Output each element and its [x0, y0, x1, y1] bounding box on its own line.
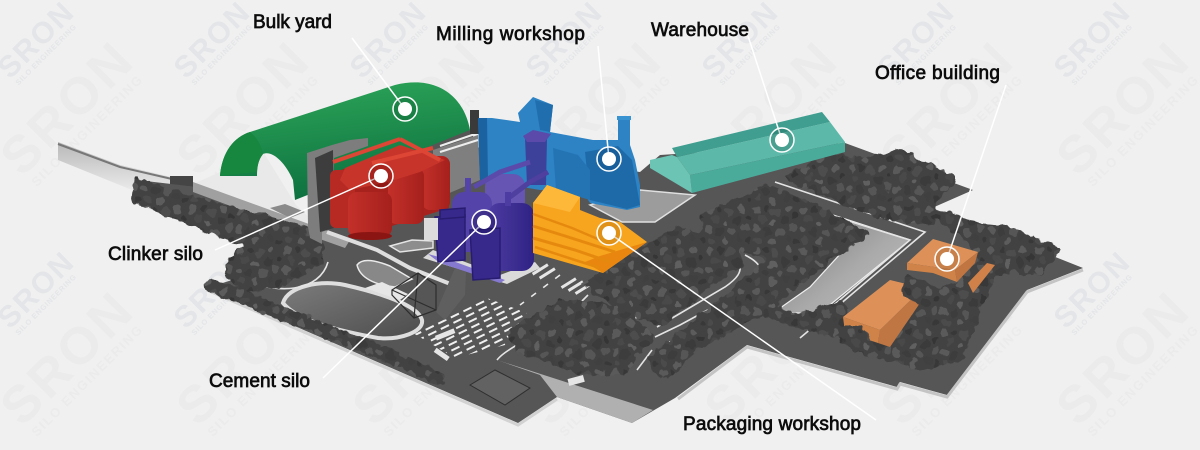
watermark pattern: SRON [344, 247, 432, 335]
watermark pattern: SRON [168, 247, 256, 335]
watermark pattern: SRON [341, 282, 496, 436]
label: Warehouse: Warehouse [651, 20, 749, 41]
pond service slab [365, 282, 408, 300]
marker: Cement silo [472, 210, 496, 234]
milling yard paving [590, 190, 695, 222]
watermark pattern: SRON [1045, 282, 1200, 436]
watermark pattern: SRON [1048, 247, 1136, 335]
watermark pattern: SILO ENGINEERING [380, 323, 497, 439]
watermark pattern: SRON [165, 32, 320, 186]
watermark pattern: SILO ENGINEERING [366, 23, 430, 87]
watermark pattern: SILO ENGINEERING [718, 273, 782, 337]
watermark pattern: SILO ENGINEERING [204, 73, 321, 189]
gravel patch by pond [357, 261, 412, 287]
watermark pattern: SRON [520, 247, 608, 335]
gatehouse [470, 370, 530, 405]
watermark pattern: SRON [341, 32, 496, 186]
building: milling workshop [478, 97, 640, 210]
watermark pattern: SILO ENGINEERING [894, 273, 958, 337]
watermark pattern: SILO ENGINEERING [908, 323, 1025, 439]
purple footing [428, 254, 505, 283]
watermark pattern: SRON [869, 32, 1024, 186]
watermark pattern: SILO ENGINEERING [1084, 73, 1200, 189]
concrete apron [497, 360, 653, 423]
marker: Milling workshop [597, 147, 621, 171]
leader line: Packaging workshop [609, 233, 876, 420]
watermark pattern: SRON [1045, 32, 1200, 186]
dome gray pad [270, 204, 305, 218]
watermark pattern: SRON [693, 282, 848, 436]
leader line: Clinker silo [215, 176, 381, 250]
label: Clinker silo: Clinker silo [108, 244, 203, 265]
watermark pattern: SILO ENGINEERING [556, 73, 673, 189]
leader line: Warehouse [748, 36, 782, 140]
building: clinker silos [330, 139, 450, 240]
leader line: Bulk yard [352, 38, 405, 109]
incoming conveyor strip [58, 142, 193, 192]
building: cement silos [424, 130, 551, 280]
rear conveyors behind silos [433, 110, 480, 200]
leader line: Milling workshop [598, 46, 609, 159]
central gravel field [773, 200, 910, 313]
watermark pattern: SILO ENGINEERING [556, 323, 673, 439]
marker: Clinker silo [369, 164, 393, 188]
leader line: Cement silo [323, 222, 484, 378]
watermark pattern: SRON [517, 282, 672, 436]
tree overlay near offices [845, 278, 942, 350]
loading frame [392, 273, 436, 318]
label: Cement silo: Cement silo [209, 371, 310, 392]
silo loading shed [436, 268, 466, 320]
crossing road markings [413, 298, 527, 358]
tree belts [135, 152, 1057, 378]
watermark pattern: SILO ENGINEERING [718, 23, 782, 87]
label: Office building: Office building [875, 63, 1000, 84]
watermark pattern: SILO ENGINEERING [190, 273, 254, 337]
watermark pattern: SILO ENGINEERING [204, 323, 321, 439]
leader line: Office building [947, 85, 1006, 259]
internal roads [225, 182, 1010, 370]
watermark pattern: SILO ENGINEERING [1070, 273, 1134, 337]
marker: Office building [935, 247, 959, 271]
settling pond [283, 283, 422, 338]
watermark pattern: SILO ENGINEERING [14, 273, 78, 337]
building: bulk yard dome [220, 82, 470, 200]
watermark pattern: SILO ENGINEERING [894, 23, 958, 87]
watermark pattern: SILO ENGINEERING [908, 73, 1025, 189]
watermark pattern: SRON [872, 247, 960, 335]
watermark pattern: SILO ENGINEERING [542, 273, 606, 337]
watermark pattern: SILO ENGINEERING [1070, 23, 1134, 87]
watermark pattern: SILO ENGINEERING [28, 73, 145, 189]
watermark pattern: SILO ENGINEERING [1084, 323, 1200, 439]
building: warehouse [650, 112, 845, 193]
watermark pattern: SILO ENGINEERING [28, 323, 145, 439]
watermark pattern: SILO ENGINEERING [14, 23, 78, 87]
main road band [193, 182, 350, 248]
watermark pattern: SRON [165, 282, 320, 436]
watermark pattern: SILO ENGINEERING [542, 23, 606, 87]
watermark pattern: SRON [693, 32, 848, 186]
watermark pattern: SILO ENGINEERING [380, 73, 497, 189]
silo yard paving [423, 250, 540, 284]
building: office blocks [843, 239, 995, 347]
label: Milling workshop: Milling workshop [436, 24, 585, 45]
diagonal service road [327, 232, 453, 285]
watermark pattern: SRON [517, 32, 672, 186]
label: Packaging workshop: Packaging workshop [683, 414, 861, 435]
dome forecourt [193, 150, 318, 226]
watermark pattern: SILO ENGINEERING [732, 323, 849, 439]
marker: Packaging workshop [597, 221, 621, 245]
building: packaging workshop [533, 185, 647, 273]
plant site base [133, 130, 1083, 425]
trucks and bus [434, 263, 591, 386]
gravel patch by clinker silos [390, 240, 433, 252]
watermark pattern: SRON [869, 282, 1024, 436]
watermark pattern: SILO ENGINEERING [732, 73, 849, 189]
watermark pattern: SRON [696, 247, 784, 335]
label: Bulk yard: Bulk yard [253, 12, 332, 33]
building: gray transfer tower [307, 138, 368, 244]
watermark pattern: SILO ENGINEERING [366, 273, 430, 337]
marker: Bulk yard [393, 97, 417, 121]
marker: Warehouse [770, 128, 794, 152]
watermark pattern: SILO ENGINEERING [190, 23, 254, 87]
